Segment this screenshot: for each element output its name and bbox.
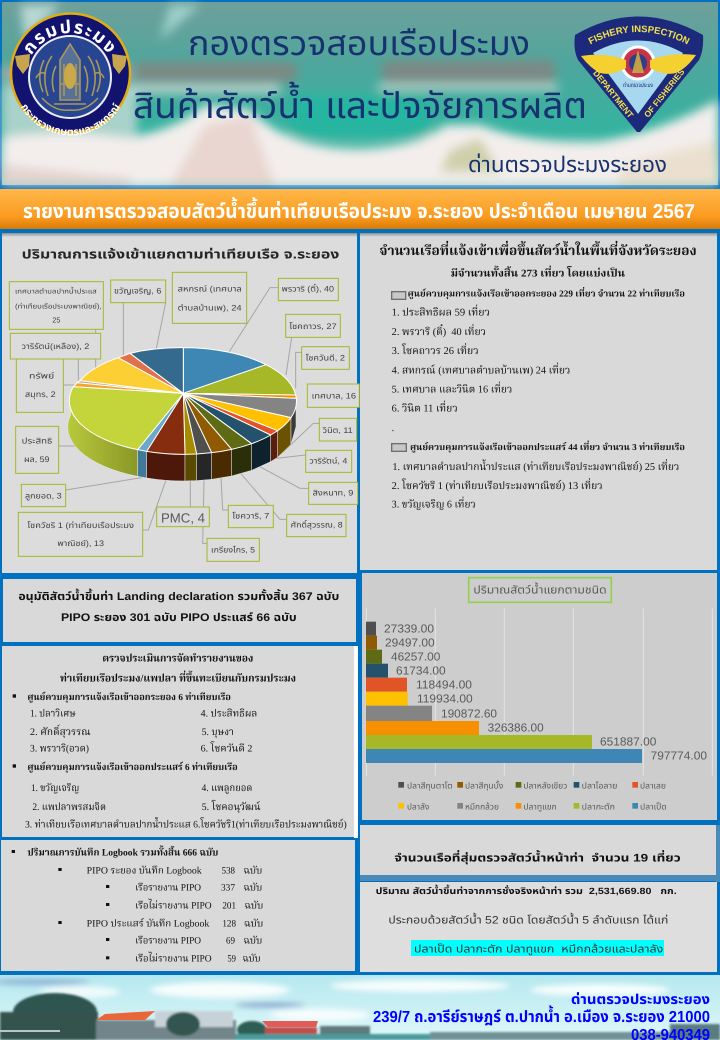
species count: ประกอบด้วยสัตว์น้ำ 52 ชนิด โดยสัตว์น้ำ 5 ลำดับแรก ได้แก่ (388, 912, 668, 926)
chart legend: ปลาโอลาย (582, 781, 617, 790)
Rayong centre list (392, 305, 570, 433)
bars and values: 46257.00 (391, 650, 440, 663)
Prasae pier list: 2. แพปลาพรสมจิต (32, 801, 106, 812)
footer harbour photo (0, 975, 720, 1040)
highlight: top five species: ปลาเป็ด ปลากะตัก ปลาทูแขก หมึกกล้วยและปลาลัง (414, 943, 663, 955)
Rayong pier list: 6. โชควันดี 2 (201, 741, 252, 754)
Prasae pier list: 1. ขวัญเจริญ (31, 782, 79, 794)
Rayong pier list: 5. บุษงา (202, 726, 234, 738)
pie label: Prasitthiphon (16, 426, 59, 473)
Prasae centre list: 3. ขวัญเจริญ 6 เที่ยว (392, 497, 476, 510)
panel: logbook totals: เรือรายงาน PIPO (135, 882, 201, 893)
chart legend: ปลากะตัก (582, 802, 615, 811)
panel: logbook totals: 337 (221, 882, 235, 893)
pie label: Chok Wandee: โชควันดี, 2 (306, 353, 345, 362)
panel: landed weight and top species (360, 882, 717, 972)
pie label: Kriangkrai: เกรียงไกร, 5 (211, 546, 255, 555)
pie label: Pornwari (278, 278, 338, 301)
Rayong pier list: 3. พรวาริ(อวด) (30, 743, 89, 754)
pie label: Pornwari: พรวาริ (ติ๋), 40 (282, 284, 334, 294)
trips total: มีจำนวนทั้งสิ้น 273 เที่ยว โดยแบ่งเป็น (451, 266, 625, 279)
pie chart heading: ปริมาณการแจ้งเข้าแยกตามท่าเทียบเรือ จ.ระยอง (22, 247, 339, 261)
panel: logbook totals: ปริมาณการบันทึก Logbook รวมทั้งสิ้น 666 ฉบับ (27, 845, 218, 858)
Rayong centre list: 1. ประสิทธิผล 59 เที่ยว (392, 305, 490, 318)
panel: logbook totals: ฉบับ (242, 953, 261, 964)
panel: vessel trips summary (360, 233, 717, 570)
panel: pier report assessment (2, 646, 358, 838)
logo: fishery inspection badge: DEPARTMENT (593, 70, 634, 118)
icon: Rayong centre marker (392, 292, 406, 299)
Prasae centre heading: ศูนย์ควบคุมการแจ้งเรือเข้าออกประแสร์ 44 เที่ยว จำนวน 3 ท่าเทียบเรือ (410, 440, 685, 453)
Prasae pier list: ศูนย์ควบคุมการแจ้งเรือเข้าออกประแสร์ 6 ท่าเทียบเรือ (27, 761, 238, 773)
pie label: Saksuwan: ศักดิ์สุวรรณ, 8 (291, 520, 343, 530)
assessment heading (60, 652, 296, 684)
Rayong pier list: 1. ปลาวิเศษ (30, 708, 76, 719)
pie label: Pak Nam Prasae municipality: (ท่าเทียบเรือประมงพาณิชย์), (15, 303, 102, 310)
pie label: Chok Wachira 1 (18, 512, 143, 556)
report title bar: รายงานการตรวจสอบสัตว์น้ำขึ้นท่าเทียบเรือประมง จ.ระยอง ประจำเดือน เมษายน 2567 (23, 197, 695, 223)
Rayong pier list (13, 691, 257, 754)
Rayong centre list: 5. เทศบาล และวินิต 16 เที่ยว (392, 382, 512, 395)
panel: random inspection count: จำนวนเรือที่สุ่มตรวจสัตว์น้ำหน้าท่า จำนวน 19 เที่ยว (394, 850, 681, 865)
panel: logbook totals: ฉบับ (244, 918, 263, 929)
pie label: Wariratana: วาริรัตน์, 4 (309, 456, 347, 465)
logo: department of fisheries seal (10, 12, 132, 136)
bars and values (366, 608, 712, 776)
subtitle: inspection office: ด่านตรวจประมงระยอง (468, 152, 667, 177)
pie label: Wariratana yellow: วาริรัตน์(เหลือง), 2 (22, 342, 89, 351)
pie label: Winit (319, 418, 357, 441)
pie label: Municipality (307, 384, 359, 407)
panel: logbook totals: 128 (222, 918, 236, 929)
title line 1: กองตรวจสอบเรือประมง (188, 25, 530, 63)
bars and values: 118494.00 (416, 678, 472, 691)
panel: logbook totals: PIPO ระยอง บันทึก Logbook (87, 865, 202, 876)
bars and values: 61734.00 (396, 664, 446, 677)
panel: landing declaration: อนุมัติสัตว์น้ำขึ้นท่า Landing declaration รวมทั้งสิ้น 367 ฉบับ (18, 588, 339, 603)
pie label: Winit: วินิต, 11 (322, 426, 353, 435)
pie label: Chok Wari (228, 505, 273, 528)
Prasae centre list (392, 459, 679, 510)
pie label: Chok Wachira 1: โชควัชริ 1 (ท่าเทียบเรือประมง (27, 521, 134, 530)
pie label: Chok Thaworn: โชคถาวร, 27 (289, 322, 337, 331)
panel: logbook totals (1, 840, 355, 971)
Rayong pier list: 4. ประสิทธิผล (201, 708, 257, 719)
icon: Prasae centre marker (392, 444, 406, 451)
Prasae pier list: 4. แพลูกยอด (202, 782, 252, 794)
bars and values: 119934.00 (417, 692, 473, 705)
pie label: PMC (157, 507, 209, 527)
bars and values: 326386.00 (488, 721, 544, 734)
pie chart side walls (68, 401, 296, 481)
pie label: Luk Yot: ลูกยอด, 3 (25, 491, 62, 501)
total landed weight: ปริมาณ สัตว์น้ำขึ้นท่าจากการชั่งจริงหน้าท่า รวม 2,531,669.80 กก. (376, 885, 677, 896)
assessment heading: ท่าเทียบเรือประมง/แพปลา ที่ขึ้นทะเบียนกับกรมประมง (60, 671, 296, 684)
pie label: Sap Samut: ทรัพย์ (29, 372, 54, 381)
report title bar (0, 189, 720, 229)
pie label: Wariratana (306, 450, 352, 472)
highlight: top five species (411, 940, 664, 956)
panel: logbook totals: PIPO ประแสร์ บันทึก Logbook (87, 918, 209, 929)
pie label: Singhanat (309, 482, 358, 504)
panel: logbook totals: เรือรายงาน PIPO (135, 935, 201, 946)
side strip (716, 825, 720, 882)
panel: logbook totals: 69 (226, 935, 235, 946)
Prasae pier list (13, 761, 347, 830)
bars and values: 27339.00 (384, 622, 434, 635)
logo: fishery inspection badge: ด่านตรวจประมง (623, 81, 653, 89)
panel: random inspection count (360, 825, 720, 881)
panel: logbook totals: เรือไม่รายงาน PIPO (135, 898, 212, 911)
Rayong pier list: ศูนย์ควบคุมการแจ้งเรือเข้าออกระยอง 6 ท่าเทียบเรือ (27, 691, 231, 703)
chart title (469, 578, 611, 602)
panel: logbook totals: ฉบับ (244, 900, 263, 911)
pie label: Chok Wari: โชควาริ, 7 (232, 512, 269, 521)
title line 2: สินค้าสัตว์น้ำ และปัจจัยการผลิต (133, 81, 587, 126)
logo: department of fisheries seal: กรมประมง (25, 20, 114, 54)
pie label: PMC: PMC, 4 (161, 511, 205, 525)
panel: landing count by pier (pie chart) (2, 233, 359, 573)
panel: logbook totals: ฉบับ (243, 935, 262, 946)
pie label: Pak Nam Prasae municipality (9, 282, 103, 329)
pie label: Pak Nam Prasae municipality: เทศบาลตำบลปากน้ำประแส (15, 286, 97, 295)
pie label: Chok Wachira 1: พาณิชย์), 13 (57, 539, 104, 548)
Prasae pier list: 5. โชคอนุวัฒน์ (202, 800, 261, 813)
Rayong centre list: . (392, 422, 394, 433)
panel: logbook totals: ฉบับ (243, 865, 262, 876)
pie label: Sahakorn: สหกรณ์ (เทศบาล (178, 285, 242, 294)
assessment heading: ตรวจประเมินการจัดทำรายงานของ (102, 652, 253, 664)
panel: logbook totals: ฉบับ (243, 882, 262, 893)
panel: landing declaration: PIPO ระยอง 301 ฉบับ PIPO ประแสร์ 66 ฉบับ (61, 611, 297, 623)
header banner (0, 0, 720, 189)
trips heading: จำนวนเรือที่แจ้งเข้าเพื่อขึ้นสัตว์น้ำในพื้นที่จังหวัดระยอง (379, 241, 697, 258)
panel: logbook totals: 201 (222, 900, 236, 911)
chart legend: ปลาเลย (640, 781, 666, 790)
pie label: Luk Yot (21, 484, 66, 507)
chart legend: ปลาลัง (407, 802, 429, 811)
bars and values: 29497.00 (385, 636, 435, 649)
chart title: ปริมาณสัตว์น้ำแยกตามชนิด (473, 582, 607, 596)
panel: logbook totals: 538 (222, 865, 235, 876)
logo: department of fisheries seal: กระทรวงเกษตรและสหกรณ์ (21, 102, 120, 136)
logo: fishery inspection badge: FISHERY INSPECTION (588, 25, 690, 44)
Prasae centre list: 2. โชควัชริ 1 (ท่าเทียบเรือประมงพาณิชย์) 13 เที่ยว (392, 478, 603, 491)
pie label: Khwanjaroen (111, 280, 166, 303)
panel: logbook totals: เรือไม่รายงาน PIPO (135, 952, 212, 964)
Rayong centre list: 6. วินิต 11 เที่ยว (392, 401, 458, 414)
pie label: Singhanat: สิงหนาท, 9 (313, 489, 353, 498)
footer office name: ด่านตรวจประมงระยอง (571, 991, 710, 1007)
pie label: Municipality: เทศบาล, 16 (312, 392, 356, 401)
pie label: Sahakorn: ตำบลบ้านเพ), 24 (178, 303, 242, 312)
chart legend (398, 780, 667, 812)
pie label: Sahakorn (172, 272, 247, 323)
pie chart top slices (69, 348, 296, 454)
leader lines (59, 288, 319, 543)
logo: fishery inspection badge: OF FISHERIES (644, 69, 684, 117)
Rayong pier list: 2. ศักดิ์สุวรรณ (30, 725, 91, 738)
chart legend: หมึกกล้วย (465, 802, 499, 811)
Rayong centre list: 2. พรวาริ (ติ๋) 40 เที่ยว (392, 324, 486, 337)
pie label: Khwanjaroen: ขวัญเจริญ, 6 (114, 287, 161, 296)
logo: fishery inspection badge (574, 16, 704, 132)
Prasae centre list: 1. เทศบาลตำบลปากน้ำประแส (ท่าเทียบเรือประมงพาณิชย์) 25 เที่ยว (392, 459, 679, 472)
panel: landing declaration (3, 579, 356, 642)
chart legend: ปลาเป็ด (640, 802, 667, 811)
panel: catch by species (bar chart) (362, 573, 717, 820)
pie label: Sap Samut (16, 358, 63, 412)
pie label: Wariratana yellow (10, 333, 101, 359)
pie label: Sap Samut: สมุทร, 2 (25, 390, 56, 399)
pie label: Pak Nam Prasae municipality: 25 (52, 316, 60, 324)
pie label: Saksuwan (287, 514, 346, 537)
Prasae pier list: 3. ท่าเทียบเรือเทศบาลตำบลปากน้ำประแส 6.โชควัชริ1(ท่าเทียบเรือประมงพาณิชย์) (25, 817, 347, 830)
bars and values: 797774.00 (651, 749, 707, 762)
pie label: Chok Wandee (302, 347, 349, 369)
chart legend: ปลาหลังเขียว (523, 781, 567, 790)
Rayong centre list: 4. สหกรณ์ (เทศบาลตำบลบ้านเพ) 24 เที่ยว (392, 363, 570, 376)
Rayong centre list: 3. โชคถาวร 26 เที่ยว (392, 343, 479, 356)
pie label: Chok Thaworn (286, 314, 340, 337)
chart legend: ปลาสีกุนบั้ง (465, 780, 503, 791)
pie label: Prasitthiphon: ประสิทธิ (22, 437, 52, 446)
pie label: Kriangkrai (207, 538, 259, 561)
bars and values: 190872.60 (441, 707, 497, 720)
header beach background (2, 2, 718, 185)
bars and values: 651887.00 (600, 735, 656, 748)
chart legend: ปลาสีกุนตาโต (407, 781, 453, 791)
footer banner (0, 975, 720, 1040)
pie label: Prasitthiphon: ผล, 59 (24, 455, 49, 464)
chart legend: ปลาทูแขก (523, 802, 557, 812)
Rayong centre heading: ศูนย์ควบคุมการแจ้งเรือเข้าออกระยอง 229 เที่ยว จำนวน 22 ท่าเทียบเรือ (408, 287, 685, 299)
panel: logbook totals: 59 (227, 953, 236, 964)
